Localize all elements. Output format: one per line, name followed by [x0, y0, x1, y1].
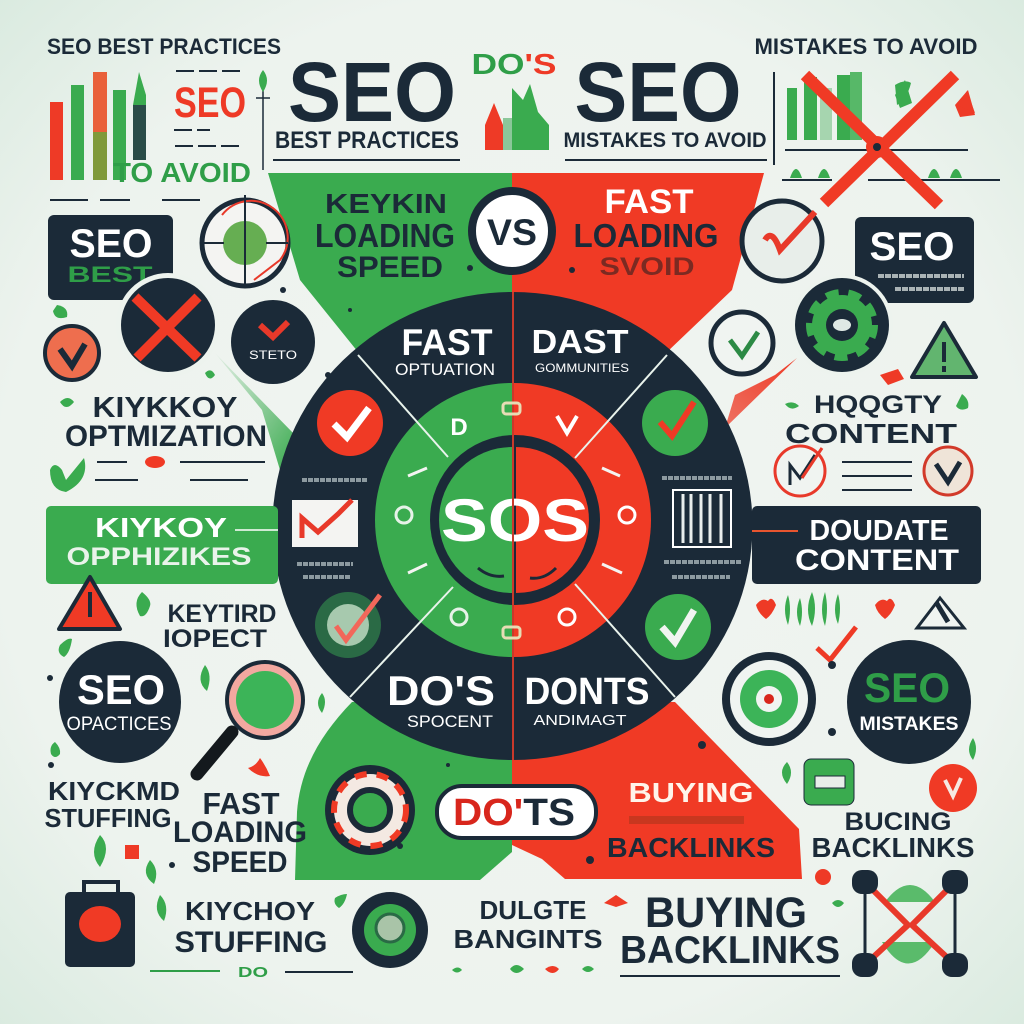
label: to avoid: TO AVOID [113, 157, 251, 188]
streak: faint green wedge [215, 353, 295, 470]
decorative red marks [125, 91, 975, 973]
text: quality content: HQQGTY [814, 391, 942, 419]
badge: SEO mistakes [847, 640, 971, 764]
panel: SEO dark block right: SEO [870, 225, 954, 269]
panel: SEO block left: BEST [68, 262, 153, 287]
streak: red wedge [725, 358, 797, 428]
panel: dark banner right: DOUDATE [810, 515, 948, 547]
panel: dark banner right: CONTENT [795, 544, 959, 577]
text: keyword stuffing bottom: DO [238, 964, 268, 981]
title: SEO best practices: BEST PRACTICES [275, 127, 459, 154]
icon: gear [325, 765, 415, 855]
text: keyword loading speed: LOADING [315, 217, 455, 254]
icon: red cross circle [116, 273, 220, 377]
title: SEO best practices: SEO [288, 45, 456, 139]
icon: target right [726, 656, 812, 742]
icon: check circle [711, 312, 773, 374]
text: keyword loading speed: SPEED [337, 251, 443, 284]
title: SEO mistakes to avoid: MISTAKES TO AVOID [564, 129, 766, 152]
label: SEO red text [174, 71, 246, 146]
panel: top red funnel [512, 173, 764, 420]
icon: red check right [929, 764, 977, 812]
text: duplicate backlinks bottom: DULGTE [480, 895, 586, 925]
badge: SEO mistakes: SEO [864, 664, 950, 711]
decorative leaves [50, 81, 976, 973]
decorative dark dots [47, 265, 836, 868]
badge: SEO practices [59, 641, 181, 763]
icon: barcode [673, 490, 731, 547]
text: quality content: CONTENT [785, 418, 957, 449]
top-left heading: SEO BEST PRACTICES [47, 34, 281, 59]
text: keyword impact: KEYTIRD [168, 600, 276, 628]
icon: mail right [775, 446, 825, 496]
text: fast loading avoid [574, 183, 718, 281]
wheel text: donts [524, 671, 650, 729]
text: buying backlinks bottom: BACKLINKS [620, 929, 840, 972]
text: keyword optimization: KIYKKOY [92, 392, 238, 424]
badge: do'ts: DO'TS [453, 792, 575, 834]
icon: small stop badge [231, 300, 315, 384]
icon: small stop badge: STETO [249, 348, 297, 362]
wheel text: fast: FAST [402, 322, 493, 363]
title: do's icon: DO 'S [472, 49, 556, 81]
text: keyword loading speed [315, 188, 455, 284]
panel: top green funnel [268, 173, 512, 420]
ring: green half [375, 383, 512, 657]
icon: mail [292, 500, 358, 547]
title: do's icon [472, 49, 556, 150]
text: keyword impact: IOPECT [163, 625, 267, 653]
icon: green check top right [642, 390, 708, 456]
icon: crossed links bottom right [852, 870, 968, 977]
text: buying backlinks right: BACKLINKS [812, 832, 974, 863]
panel: SEO dark block right [855, 217, 974, 303]
icon: gauge [202, 195, 288, 286]
label: SEO red text: SEO [174, 79, 246, 127]
ring: red half [514, 383, 651, 657]
wheel text: do's: DO'S [387, 667, 495, 714]
badge: VS [472, 191, 552, 271]
title: SEO mistakes to avoid: SEO [574, 45, 742, 139]
text: keyword stuffing bottom: STUFFING [174, 926, 328, 959]
icon: warning outline right [917, 598, 964, 628]
hub: green half [439, 447, 512, 593]
icon: red check [317, 390, 383, 456]
text: fast loading avoid: LOADING [574, 217, 718, 254]
icon: red check small [817, 627, 856, 660]
text: fast loading avoid: SVOID [600, 253, 694, 281]
panel: green banner left [46, 506, 278, 584]
icon: check circle left [45, 326, 99, 380]
badge: VS: VS [487, 212, 537, 253]
small lines left [95, 456, 265, 480]
hub label: SOS [441, 487, 589, 554]
icon: warning triangle right [912, 323, 976, 377]
text: fast loading speed: LOADING [173, 816, 307, 849]
top-right heading: MISTAKES TO AVOID [754, 34, 978, 59]
text: quality content [785, 391, 957, 449]
icon: warning triangle left [59, 577, 120, 629]
icon: magnifying glass [197, 660, 305, 774]
icon: green check bottom right [645, 594, 711, 660]
wheel text: do's [387, 667, 495, 731]
panel: SEO block left [48, 215, 173, 300]
text: fast loading speed: SPEED [192, 846, 288, 879]
text: fast loading speed: FAST [202, 786, 280, 821]
text: buying backlinks right: BUCING [844, 808, 952, 836]
panel: bottom red funnel [512, 700, 802, 879]
text: duplicate backlinks bottom [454, 895, 630, 970]
badge: SEO mistakes: MISTAKES [860, 714, 958, 735]
badge: SEO practices: SEO [77, 666, 165, 713]
bar chart: top left [50, 72, 200, 200]
wheel text: dast: GOMMUNITIES [535, 361, 629, 375]
text: buying backlinks bottom: BUYING [645, 889, 807, 937]
icon: crossed chart top right [782, 72, 1000, 205]
divider with leaf [256, 70, 270, 170]
badge: SEO practices: OPACTICES [66, 714, 172, 735]
title: SEO mistakes to avoid [564, 45, 774, 165]
text: keyword optimization: OPTMIZATION [65, 420, 267, 453]
wheel text: donts: ANDIMAGT [534, 712, 626, 729]
wheel text: fast [395, 322, 495, 379]
text: buying backlinks right [812, 808, 974, 863]
text: buying backlinks red panel: BACKLINKS [607, 832, 775, 863]
text: buying backlinks red panel: BUYING [628, 777, 754, 808]
text: keyword optimization [65, 392, 267, 453]
ring icons [396, 403, 635, 638]
icon: small card [804, 759, 854, 805]
panel: green banner left: KIYKOY [95, 512, 227, 543]
ring mark: V [557, 416, 577, 433]
icon: green check left [50, 458, 85, 492]
icon: bag [65, 882, 135, 967]
hub: red half [516, 447, 589, 593]
text: keyword stuffing bottom: KIYCHOY [185, 896, 315, 926]
badge: do'ts [437, 786, 596, 838]
text: fast loading speed [173, 786, 307, 879]
panel: bottom green funnel [295, 700, 512, 880]
icon: check ring top right [742, 201, 822, 281]
text: keyword stuffing: KIYCKMD [48, 776, 180, 806]
wheel text: dast: DAST [532, 323, 628, 360]
wheel text: fast: OPTUATION [395, 360, 495, 379]
panel: dark banner right [752, 506, 981, 584]
wheel text: donts: DONTS [524, 671, 650, 713]
text: keyword impact [163, 600, 276, 653]
panel: SEO block left: SEO [70, 222, 152, 266]
small text: left of wheel [297, 480, 367, 577]
text: keyword stuffing: STUFFING [44, 803, 172, 833]
icon: target check bottom left [315, 592, 381, 658]
icon: green gear [791, 274, 893, 376]
ring letter: D: D [450, 414, 468, 441]
icon: target bottom centre [352, 892, 428, 968]
wheel text: do's: SPOCENT [407, 712, 493, 731]
text: keyword stuffing bottom [150, 896, 353, 981]
small text: right of wheel [662, 478, 742, 577]
text: buying backlinks red panel [607, 777, 775, 863]
text: keyword loading speed: KEYKIN [325, 188, 447, 219]
wheel text: dast [532, 323, 629, 375]
chart: central wheel [272, 292, 752, 760]
panel: green banner left: OPPHIZIKES [66, 543, 252, 571]
hub [430, 435, 600, 605]
text: buying backlinks bottom [620, 889, 840, 976]
small lines right [842, 462, 912, 490]
icon: check circle right [924, 447, 972, 495]
text: duplicate backlinks bottom: BANGINTS [454, 924, 602, 954]
text: keyword stuffing [44, 776, 180, 833]
text: fast loading avoid: FAST [604, 183, 694, 221]
